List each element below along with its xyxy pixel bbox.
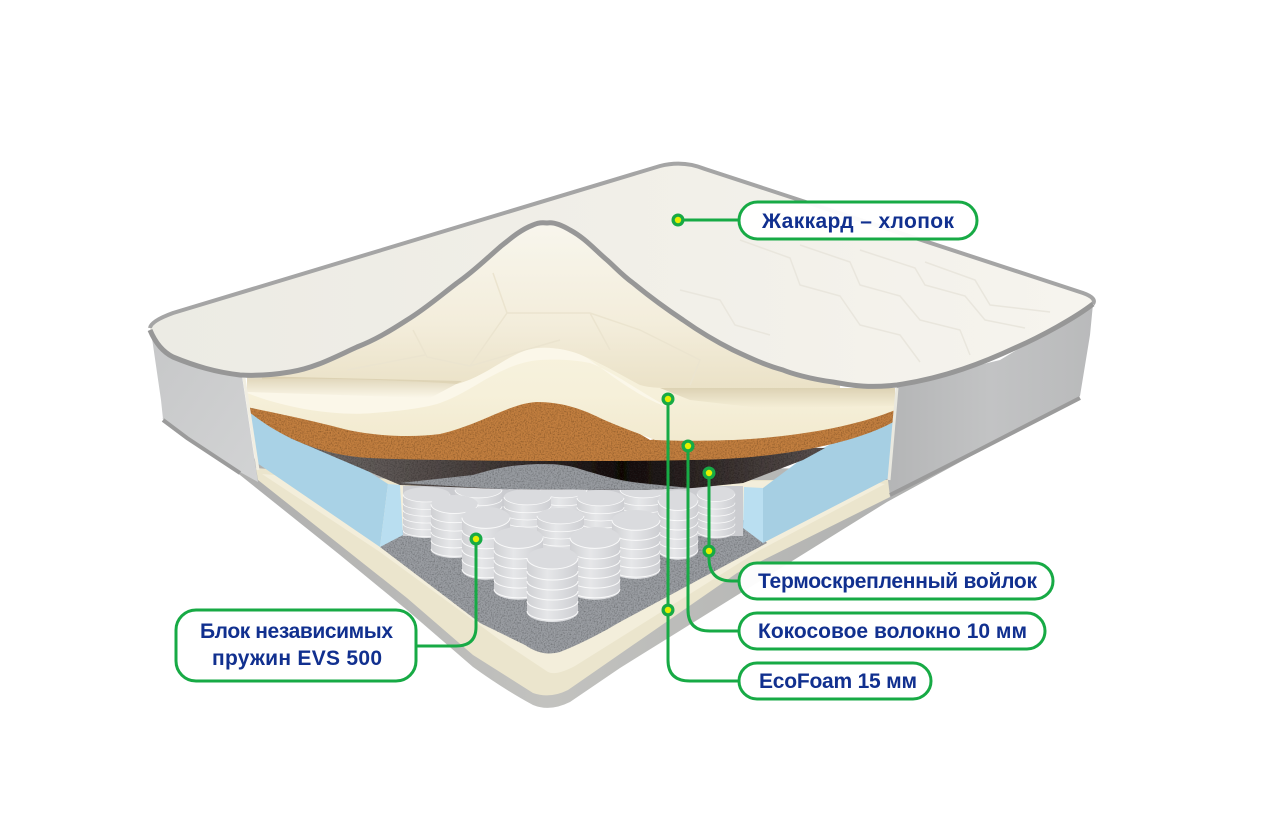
grey outer shell and bottom band	[162, 396, 1080, 708]
pocket spring block	[403, 482, 743, 622]
callout: independent spring block: Блок независимых	[200, 620, 393, 643]
callout: coconut fibre: Кокосовое волокно 10 мм	[758, 620, 1027, 643]
quilted top cover with grey piping	[150, 164, 1094, 386]
mattress illustration	[150, 164, 1094, 708]
bottom foam layer	[256, 468, 890, 695]
callout: EcoFoam	[662, 392, 931, 699]
right blue foam side rail	[743, 412, 895, 543]
lower seam piping	[163, 398, 1080, 495]
left quilted side panel	[150, 326, 258, 482]
callout: jacquard cotton	[672, 202, 977, 239]
lifted edge piping	[150, 223, 1093, 386]
callout: independent spring block	[176, 532, 482, 681]
foam shadow under the cover, right	[660, 388, 895, 408]
callout: coconut fibre	[682, 440, 1045, 649]
callout: jacquard cotton: Жаккард – хлопок	[761, 210, 954, 233]
foam shadow under the cover, left	[247, 376, 462, 398]
grey thermobonded felt hump	[400, 464, 690, 490]
callout: EcoFoam: EcoFoam 15 мм	[759, 670, 917, 693]
cover quilting pattern	[680, 240, 1050, 362]
callout: thermobonded felt	[702, 466, 1053, 599]
bottom felt pad	[380, 520, 767, 653]
quilted underside of the lifted cover	[262, 223, 840, 392]
coconut fibre layer	[248, 398, 895, 461]
callout: independent spring block: пружин EVS 500	[212, 647, 382, 670]
cream edge of the left cut	[244, 378, 258, 470]
right quilted side panel	[887, 304, 1093, 499]
cream edge of the right cut	[889, 388, 897, 480]
left blue foam side rail	[248, 405, 403, 547]
top foam layer	[247, 348, 895, 441]
callout: thermobonded felt: Термоскрепленный войлок	[758, 570, 1037, 593]
dark thermobonded felt	[290, 438, 825, 490]
top edge piping	[150, 164, 1094, 328]
